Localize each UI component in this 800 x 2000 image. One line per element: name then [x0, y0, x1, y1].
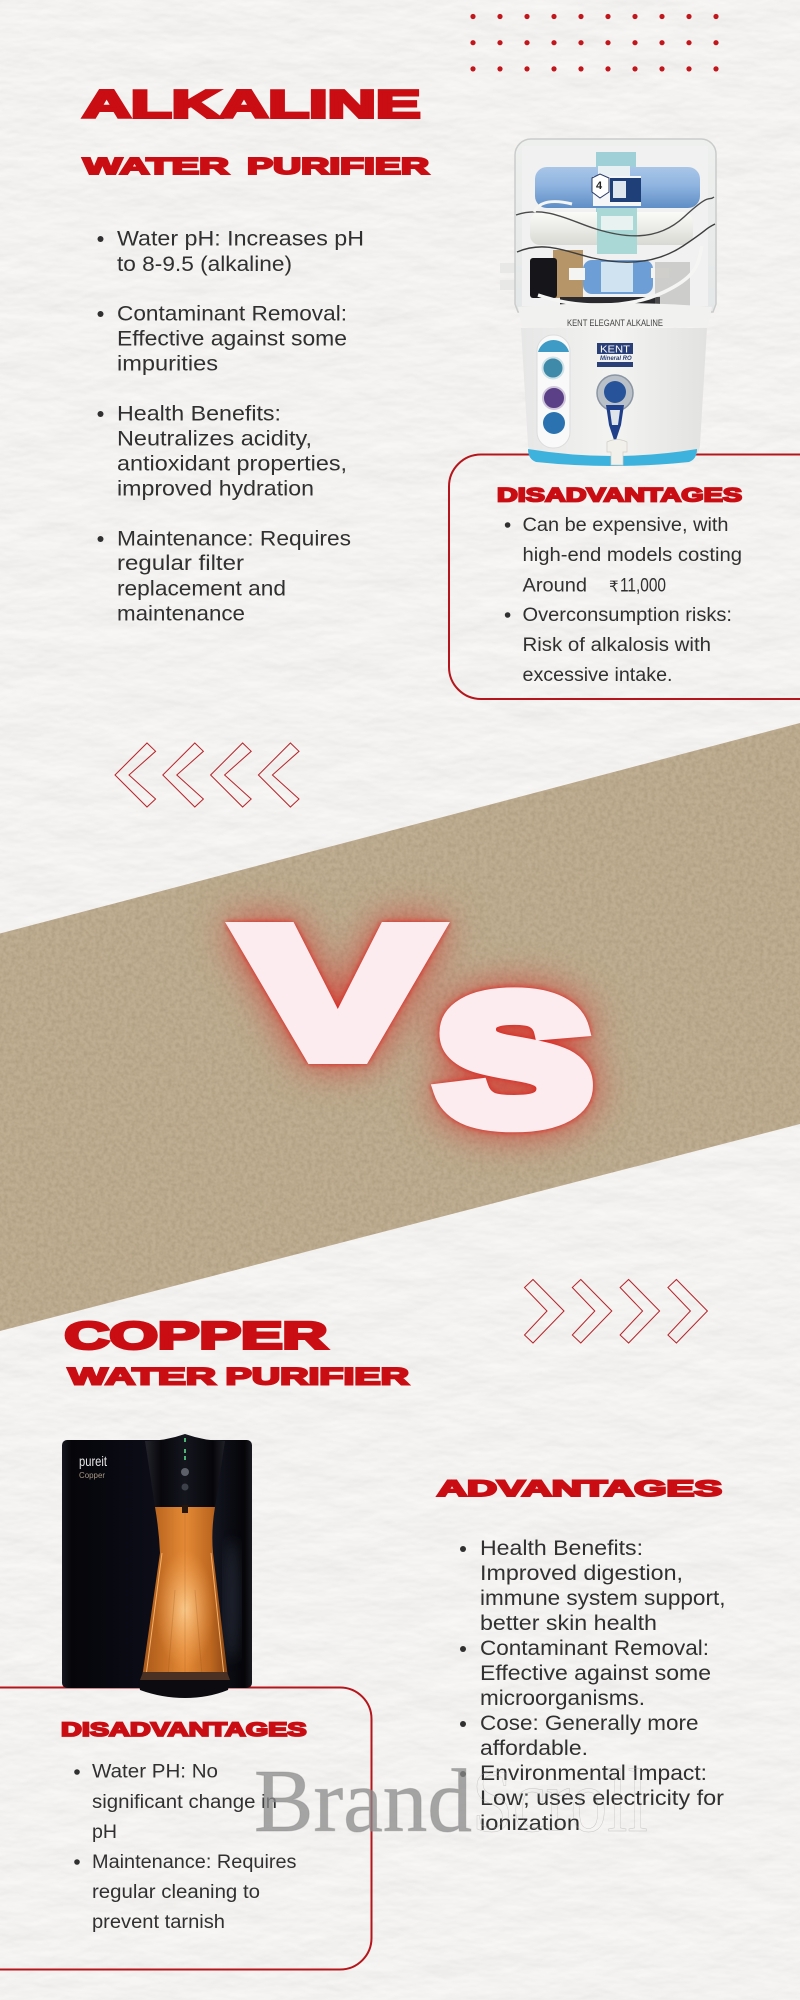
- transparent hood: [515, 139, 716, 312]
- subtitle: water purifier (copper): WATER: [68, 1364, 216, 1390]
- list: copper advantages: Environmental Impact:: [480, 1761, 707, 1785]
- lower tank: [521, 328, 707, 457]
- pump: [553, 250, 583, 298]
- list: copper advantages: microorganisms.: [480, 1686, 645, 1710]
- list: alkaline features: [98, 227, 364, 625]
- list: alkaline features: impurities: [117, 352, 218, 376]
- neck band: [518, 303, 712, 327]
- list: copper advantages: Improved digestion,: [480, 1561, 683, 1585]
- Kent logo: KENT: [600, 344, 630, 356]
- list: copper disadvantages: [74, 1762, 296, 1933]
- copper vase: [142, 1507, 228, 1678]
- base: [138, 1680, 230, 1698]
- list: copper advantages: ionization: [480, 1811, 580, 1835]
- title: copper: COPPER: [64, 1316, 328, 1358]
- cartridge: top blue: [535, 167, 700, 208]
- list: alkaline disadvantages: Risk of alkalosis with: [522, 635, 711, 656]
- list: alkaline features: Contaminant Removal:: [117, 302, 347, 326]
- list: alkaline features: improved hydration: [117, 476, 314, 500]
- list: alkaline features: Health Benefits:: [117, 402, 281, 426]
- title: alkaline: ALKALINE: [82, 84, 420, 126]
- dial and tap: [597, 375, 633, 411]
- copper grille: [140, 1672, 230, 1680]
- list: alkaline features: regular filter: [117, 551, 244, 575]
- watermark: Brand Scroll: Scroll: [472, 1752, 648, 1851]
- heading: versus: s: [433, 909, 595, 1172]
- subtitle: water purifier (copper): PURIFIER: [226, 1364, 409, 1390]
- list: copper disadvantages: Maintenance: Requires: [92, 1852, 296, 1873]
- subtitle: water purifier (alkaline): WATER: [83, 153, 230, 179]
- heading: versus: V: [239, 890, 436, 1097]
- list: copper disadvantages: pH: [92, 1822, 117, 1843]
- back panel: [522, 146, 708, 306]
- cartridge: middle white: [530, 212, 693, 245]
- list: copper disadvantages: significant change in: [92, 1792, 277, 1813]
- list: copper advantages: Effective against some: [480, 1661, 711, 1685]
- list: alkaline features: Neutralizes acidity,: [117, 426, 312, 450]
- list: alkaline disadvantages: ₹: [609, 577, 619, 595]
- list: alkaline disadvantages: excessive intake.: [522, 665, 672, 686]
- list: alkaline features: to 8-9.5 (alkaline): [117, 252, 292, 276]
- list: alkaline disadvantages: [505, 515, 742, 686]
- dark lower interior: [560, 297, 660, 308]
- image: Kent alkaline water purifier: 4: [596, 180, 603, 192]
- list: copper disadvantages: prevent tarnish: [92, 1912, 225, 1933]
- list: copper advantages: Low; uses electricity for: [480, 1786, 724, 1810]
- Kent logo: [597, 343, 633, 367]
- cabinet: [62, 1440, 252, 1688]
- cartridge: lower blue: [583, 260, 653, 294]
- watermark: Brand Scroll: Brand: [254, 1752, 472, 1851]
- list: copper advantages: Health Benefits:: [480, 1536, 643, 1560]
- list: copper disadvantages: Water PH: No: [92, 1762, 218, 1783]
- teal label top: [596, 152, 636, 212]
- indicator lights: [184, 1438, 186, 1460]
- heading: disadvantages: DISADVANTAGES: [61, 1719, 307, 1741]
- panel outline: [449, 454, 800, 699]
- heading: disadvantages: DISADVANTAGES: [497, 484, 742, 506]
- list: copper advantages: affordable.: [480, 1736, 588, 1760]
- list: alkaline features: Water pH: Increases pH: [117, 227, 364, 251]
- list: copper advantages: better skin health: [480, 1611, 657, 1635]
- list: alkaline disadvantages: Around: [522, 575, 587, 596]
- heading: versus: [239, 890, 595, 1172]
- list: alkaline disadvantages: Overconsumption risks:: [522, 605, 732, 626]
- badge strip: [537, 335, 570, 448]
- side sheen: [224, 1540, 240, 1660]
- band: diagonal beige strip: [0, 723, 800, 1331]
- central neck: [145, 1434, 225, 1507]
- list: copper advantages: Contaminant Removal:: [480, 1636, 709, 1660]
- subtitle: water purifier (alkaline): [83, 153, 430, 179]
- list: alkaline disadvantages: high-end models costing: [522, 545, 742, 566]
- list: copper disadvantages: regular cleaning to: [92, 1882, 260, 1903]
- panel: copper disadvantages: [0, 1688, 372, 1970]
- list: alkaline features: Maintenance: Requires: [117, 526, 351, 550]
- subtitle: water purifier (alkaline): PURIFIER: [247, 153, 430, 179]
- model name: KENT ELEGANT ALKALINE: [567, 318, 663, 329]
- list: copper advantages: [460, 1536, 726, 1835]
- list: alkaline features: maintenance: [117, 601, 245, 625]
- list: copper advantages: Cose: Generally more: [480, 1711, 698, 1735]
- decorative dot grid: [470, 14, 719, 71]
- image: Pureit Copper water purifier: [62, 1434, 252, 1698]
- subtitle: water purifier (copper): [68, 1364, 409, 1390]
- Kent logo: Mineral RO: [600, 356, 632, 362]
- image: Kent alkaline water purifier: [500, 139, 716, 466]
- vase streaks: [168, 1510, 202, 1675]
- brand mark: pureit: [79, 1453, 107, 1469]
- list: alkaline features: replacement and: [117, 576, 286, 600]
- vase edge highlights: [146, 1553, 224, 1676]
- list: alkaline features: antioxidant properties,: [117, 452, 347, 476]
- model name: Copper: [79, 1471, 105, 1480]
- panel: alkaline disadvantages: [449, 454, 800, 699]
- arrows: left-pointing chevrons: [115, 743, 299, 807]
- watermark: Brand Scroll: [254, 1752, 648, 1851]
- list: copper advantages: immune system support,: [480, 1586, 726, 1610]
- list: alkaline disadvantages: Can be expensive, with: [522, 515, 728, 536]
- list: alkaline disadvantages: 11,000: [620, 575, 666, 596]
- blue base: [528, 449, 697, 466]
- tubing and wires: [538, 246, 702, 305]
- arrows: right-pointing chevrons: [524, 1280, 707, 1343]
- list: alkaline features: Effective against some: [117, 326, 347, 350]
- panel outline: [0, 1688, 372, 1970]
- side fittings: [500, 263, 516, 290]
- heading: advantages: ADVANTAGES: [437, 1476, 722, 1501]
